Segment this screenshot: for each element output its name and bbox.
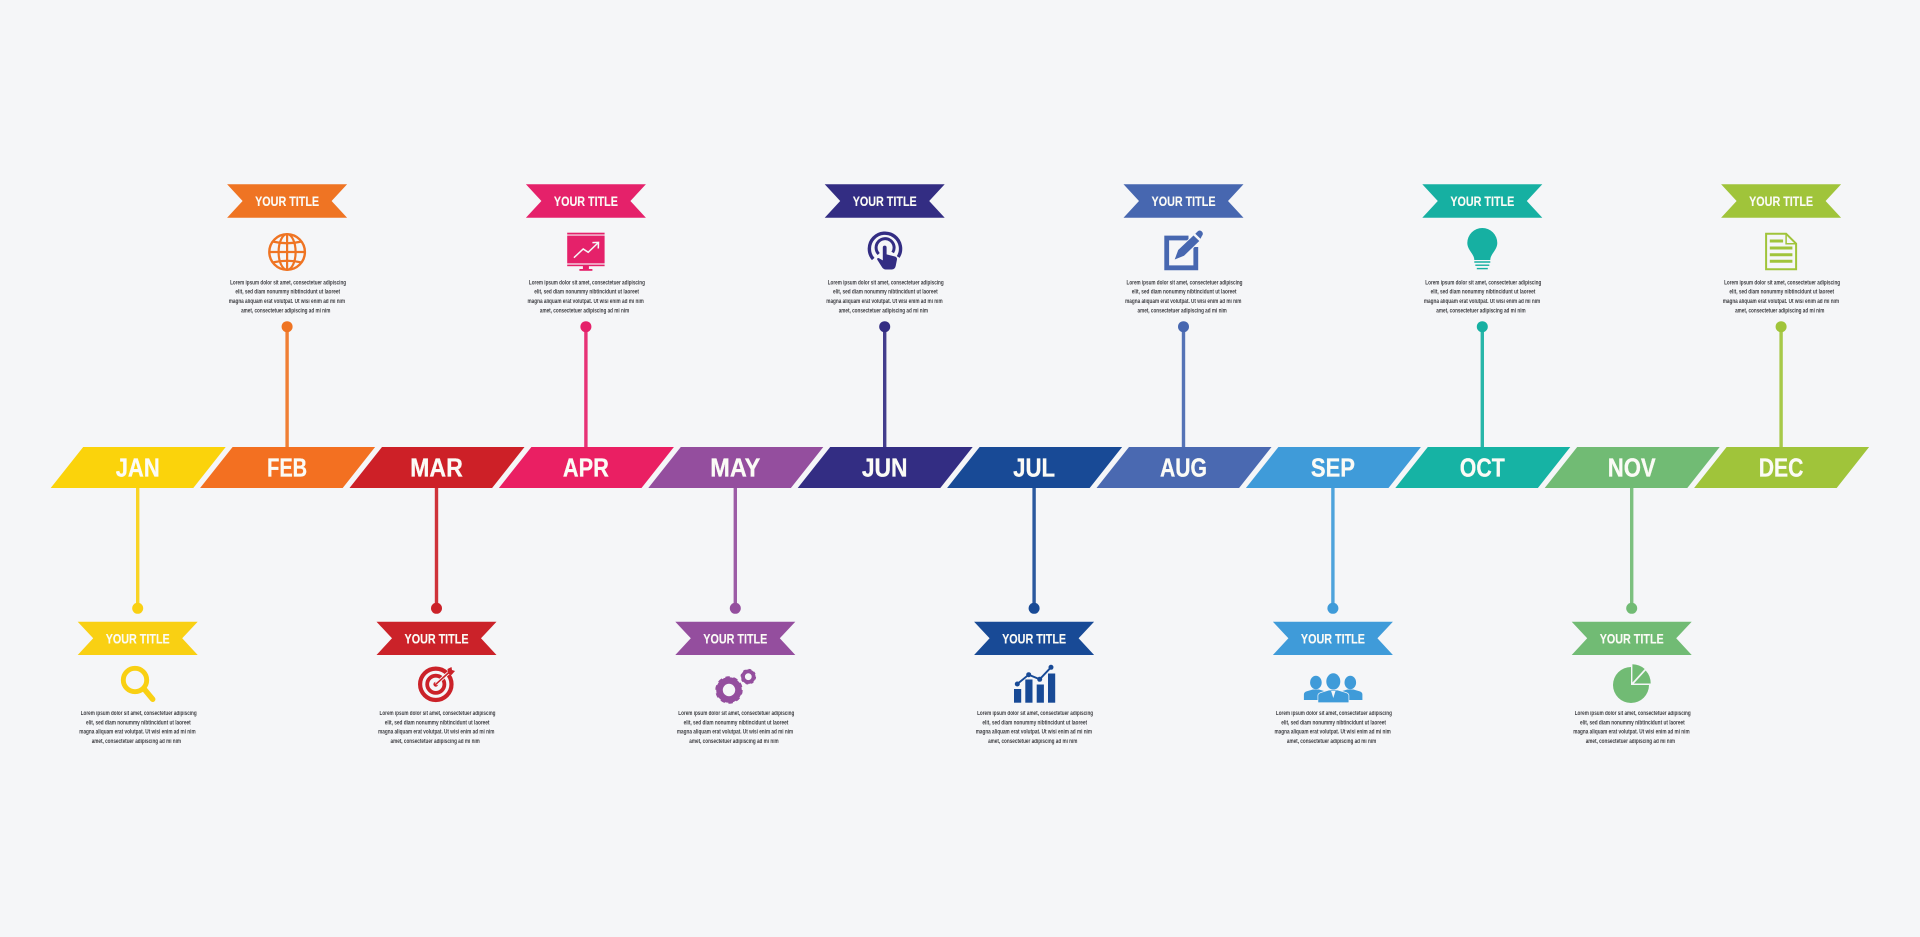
month segment: AUG: AUG	[1160, 453, 1207, 483]
title ribbon: FEB: YOUR TITLE	[255, 194, 319, 209]
text block: MAY: magna aliquam erat volutpat. Ut wisi enim ad mi nim	[677, 730, 793, 736]
month segment: OCT: OCT	[1460, 453, 1505, 483]
text block: AUG: Lorem ipsum dolor sit amet, consectetuer adipiscing	[1126, 280, 1243, 286]
icon: presentation screen	[567, 233, 605, 271]
connector: MAR	[431, 488, 442, 614]
text block: FEB: Lorem ipsum dolor sit amet, consectetuer adipiscing	[230, 280, 346, 286]
text block: MAR	[378, 711, 496, 745]
icon: bar chart with trend line	[1014, 665, 1055, 703]
text block: NOV: elit, sed diam nonummy nibtincidunt ut laoreet	[1580, 720, 1685, 726]
text block: DEC: magna aliquam erat volutpat. Ut wisi enim ad mi nim	[1723, 299, 1839, 305]
text block: FEB: amet, consectetuer adipiscing ad mi nim	[241, 308, 330, 314]
title ribbon: DEC: YOUR TITLE	[1749, 194, 1813, 209]
text block: MAY: amet, consectetuer adipiscing ad mi nim	[689, 739, 779, 745]
text block: JAN	[79, 711, 197, 745]
title ribbon: SEP: YOUR TITLE	[1301, 631, 1365, 646]
connector: DEC	[1776, 321, 1787, 447]
month segment: SEP: SEP	[1311, 453, 1355, 483]
milestone: FEB	[227, 184, 347, 447]
text block: JUL: Lorem ipsum dolor sit amet, consectetuer adipiscing	[977, 711, 1093, 717]
milestone: MAR	[376, 488, 496, 745]
connector: JUL	[1029, 488, 1040, 614]
milestone: JUN	[825, 184, 945, 447]
milestone: JAN	[78, 488, 198, 745]
text block: NOV: amet, consectetuer adipiscing ad mi nim	[1586, 739, 1675, 745]
month segment: JAN: JAN	[116, 453, 160, 483]
text block: APR	[528, 280, 645, 314]
icon: light bulb	[1467, 228, 1497, 269]
title ribbon: APR: YOUR TITLE	[554, 194, 618, 209]
text block: OCT: elit, sed diam nonummy nibtincidunt ut laoreet	[1431, 290, 1535, 296]
title ribbon: JUN	[825, 184, 945, 218]
text block: NOV: Lorem ipsum dolor sit amet, consectetuer adipiscing	[1575, 711, 1691, 717]
text block: APR: elit, sed diam nonummy nibtincidunt ut laoreet	[534, 290, 639, 296]
month segment: AUG	[1096, 447, 1272, 488]
icon: pie chart	[1613, 664, 1651, 703]
connector: SEP	[1327, 488, 1338, 614]
text block: MAR: Lorem ipsum dolor sit amet, consectetuer adipiscing	[380, 711, 496, 717]
timeline bar	[51, 447, 1869, 488]
title ribbon: JAN: YOUR TITLE	[106, 631, 170, 646]
text block: JAN: amet, consectetuer adipiscing ad mi nim	[92, 739, 181, 745]
text block: JAN: Lorem ipsum dolor sit amet, consectetuer adipiscing	[81, 711, 197, 717]
text block: JUL: magna aliquam erat volutpat. Ut wisi enim ad mi nim	[976, 730, 1092, 736]
icon: globe	[269, 234, 305, 270]
text block: OCT: magna aliquam erat volutpat. Ut wisi enim ad mi nim	[1424, 299, 1540, 305]
icon: touch gesture	[869, 233, 901, 270]
month segment: JUL	[947, 447, 1122, 488]
title ribbon: MAY	[675, 622, 795, 655]
month segment: DEC	[1694, 447, 1869, 488]
connector: MAY	[730, 488, 741, 614]
title ribbon: JUL	[974, 622, 1094, 655]
text block: MAY: Lorem ipsum dolor sit amet, consectetuer adipiscing	[678, 711, 795, 717]
icon: document	[1766, 234, 1796, 269]
text block: SEP: magna aliquam erat volutpat. Ut wisi enim ad mi nim	[1275, 730, 1391, 736]
text block: AUG: magna aliquam erat volutpat. Ut wisi enim ad mi nim	[1125, 299, 1241, 305]
text block: FEB	[229, 280, 346, 314]
text block: OCT	[1424, 280, 1542, 314]
title ribbon: FEB	[227, 184, 347, 218]
month segment: NOV	[1545, 447, 1720, 488]
title ribbon: DEC	[1721, 184, 1841, 218]
title ribbon: MAR: YOUR TITLE	[405, 631, 468, 646]
month segment: MAY	[648, 447, 823, 488]
text block: SEP: Lorem ipsum dolor sit amet, consectetuer adipiscing	[1276, 711, 1392, 717]
text block: SEP	[1274, 711, 1392, 745]
text block: AUG: amet, consectetuer adipiscing ad mi nim	[1138, 308, 1227, 314]
month segment: NOV: NOV	[1608, 453, 1656, 483]
title ribbon: NOV: YOUR TITLE	[1600, 631, 1664, 646]
milestone: DEC	[1721, 184, 1841, 447]
month segment: MAY: MAY	[710, 453, 760, 483]
connector: AUG	[1178, 321, 1189, 447]
title ribbon: AUG: YOUR TITLE	[1152, 194, 1215, 209]
text block: NOV	[1573, 711, 1691, 745]
month segment: APR	[499, 447, 674, 488]
text block: JUL	[976, 711, 1093, 745]
title ribbon: JUL: YOUR TITLE	[1002, 631, 1066, 646]
title ribbon: JAN	[78, 622, 198, 655]
milestone: NOV	[1572, 488, 1692, 745]
title ribbon: SEP	[1273, 622, 1393, 655]
month segment: SEP	[1246, 447, 1421, 488]
month segment: FEB: FEB	[267, 453, 307, 483]
text block: OCT: Lorem ipsum dolor sit amet, consectetuer adipiscing	[1425, 280, 1542, 286]
icon: gears	[717, 670, 755, 702]
text block: MAR: magna aliquam erat volutpat. Ut wisi enim ad mi nim	[378, 730, 494, 736]
text block: MAR: elit, sed diam nonummy nibtincidunt ut laoreet	[385, 720, 489, 726]
connector: NOV	[1626, 488, 1637, 614]
text block: APR: amet, consectetuer adipiscing ad mi nim	[540, 308, 629, 314]
month segment: MAR: MAR	[410, 453, 463, 483]
icon: group of people	[1304, 673, 1362, 703]
title ribbon: MAR	[376, 622, 496, 655]
text block: JUL: amet, consectetuer adipiscing ad mi nim	[988, 739, 1077, 745]
month segment: OCT	[1395, 447, 1570, 488]
milestone: AUG	[1124, 184, 1244, 447]
milestone: JUL	[974, 488, 1094, 745]
month segment: APR: APR	[563, 453, 609, 483]
title ribbon: OCT	[1422, 184, 1542, 218]
title ribbon: OCT: YOUR TITLE	[1450, 194, 1514, 209]
milestone: APR	[526, 184, 646, 447]
text block: NOV: magna aliquam erat volutpat. Ut wisi enim ad mi nim	[1573, 730, 1690, 736]
connector: JAN	[132, 488, 143, 614]
connector: FEB	[282, 321, 293, 447]
milestone: MAY	[675, 488, 795, 745]
title ribbon: NOV	[1572, 622, 1692, 655]
text block: AUG: elit, sed diam nonummy nibtincidunt ut laoreet	[1132, 290, 1236, 296]
month segment: JUL: JUL	[1013, 453, 1055, 483]
text block: DEC: amet, consectetuer adipiscing ad mi nim	[1735, 308, 1824, 314]
title ribbon: APR	[526, 184, 646, 218]
text block: DEC: Lorem ipsum dolor sit amet, consectetuer adipiscing	[1724, 280, 1840, 286]
connector: APR	[580, 321, 591, 447]
text block: SEP: amet, consectetuer adipiscing ad mi nim	[1287, 739, 1376, 745]
month segment: FEB	[200, 447, 375, 488]
text block: JUN: elit, sed diam nonummy nibtincidunt ut laoreet	[833, 290, 938, 296]
title ribbon: JUN: YOUR TITLE	[853, 194, 917, 209]
text block: JUN: amet, consectetuer adipiscing ad mi nim	[839, 308, 928, 314]
text block: DEC	[1723, 280, 1840, 314]
month segment: DEC: DEC	[1759, 453, 1804, 483]
month segment: JUN: JUN	[862, 453, 908, 483]
text block: JAN: magna aliquam erat volutpat. Ut wisi enim ad mi nim	[79, 730, 196, 736]
text block: MAY: elit, sed diam nonummy nibtincidunt ut laoreet	[684, 720, 788, 726]
text block: JUN: Lorem ipsum dolor sit amet, consectetuer adipiscing	[828, 280, 944, 286]
month segment: JAN	[51, 447, 226, 488]
connector: JUN	[879, 321, 890, 447]
text block: FEB: elit, sed diam nonummy nibtincidunt ut laoreet	[235, 290, 340, 296]
title ribbon: AUG	[1124, 184, 1244, 218]
text block: APR: Lorem ipsum dolor sit amet, consectetuer adipiscing	[529, 280, 645, 286]
text block: DEC: elit, sed diam nonummy nibtincidunt ut laoreet	[1729, 290, 1834, 296]
month segment: MAR	[350, 447, 524, 488]
icon: magnifying glass	[123, 668, 153, 699]
text block: OCT: amet, consectetuer adipiscing ad mi nim	[1436, 308, 1526, 314]
text block: MAY	[677, 711, 795, 745]
icon: edit pencil and square	[1167, 231, 1203, 268]
text block: APR: magna aliquam erat volutpat. Ut wisi enim ad mi nim	[528, 299, 644, 305]
milestone: SEP	[1273, 488, 1393, 745]
title ribbon: MAY: YOUR TITLE	[703, 631, 767, 646]
text block: JUN	[826, 280, 944, 314]
text block: JAN: elit, sed diam nonummy nibtincidunt ut laoreet	[86, 720, 191, 726]
icon: target	[420, 667, 455, 700]
text block: AUG	[1125, 280, 1243, 314]
milestone: OCT	[1422, 184, 1542, 447]
text block: JUL: elit, sed diam nonummy nibtincidunt ut laoreet	[982, 720, 1087, 726]
text block: FEB: magna aliquam erat volutpat. Ut wisi enim ad mi nim	[229, 299, 345, 305]
connector: OCT	[1477, 321, 1488, 447]
text block: MAR: amet, consectetuer adipiscing ad mi nim	[390, 739, 480, 745]
month segment: JUN	[798, 447, 973, 488]
text block: SEP: elit, sed diam nonummy nibtincidunt ut laoreet	[1281, 720, 1386, 726]
text block: JUN: magna aliquam erat volutpat. Ut wisi enim ad mi nim	[826, 299, 943, 305]
